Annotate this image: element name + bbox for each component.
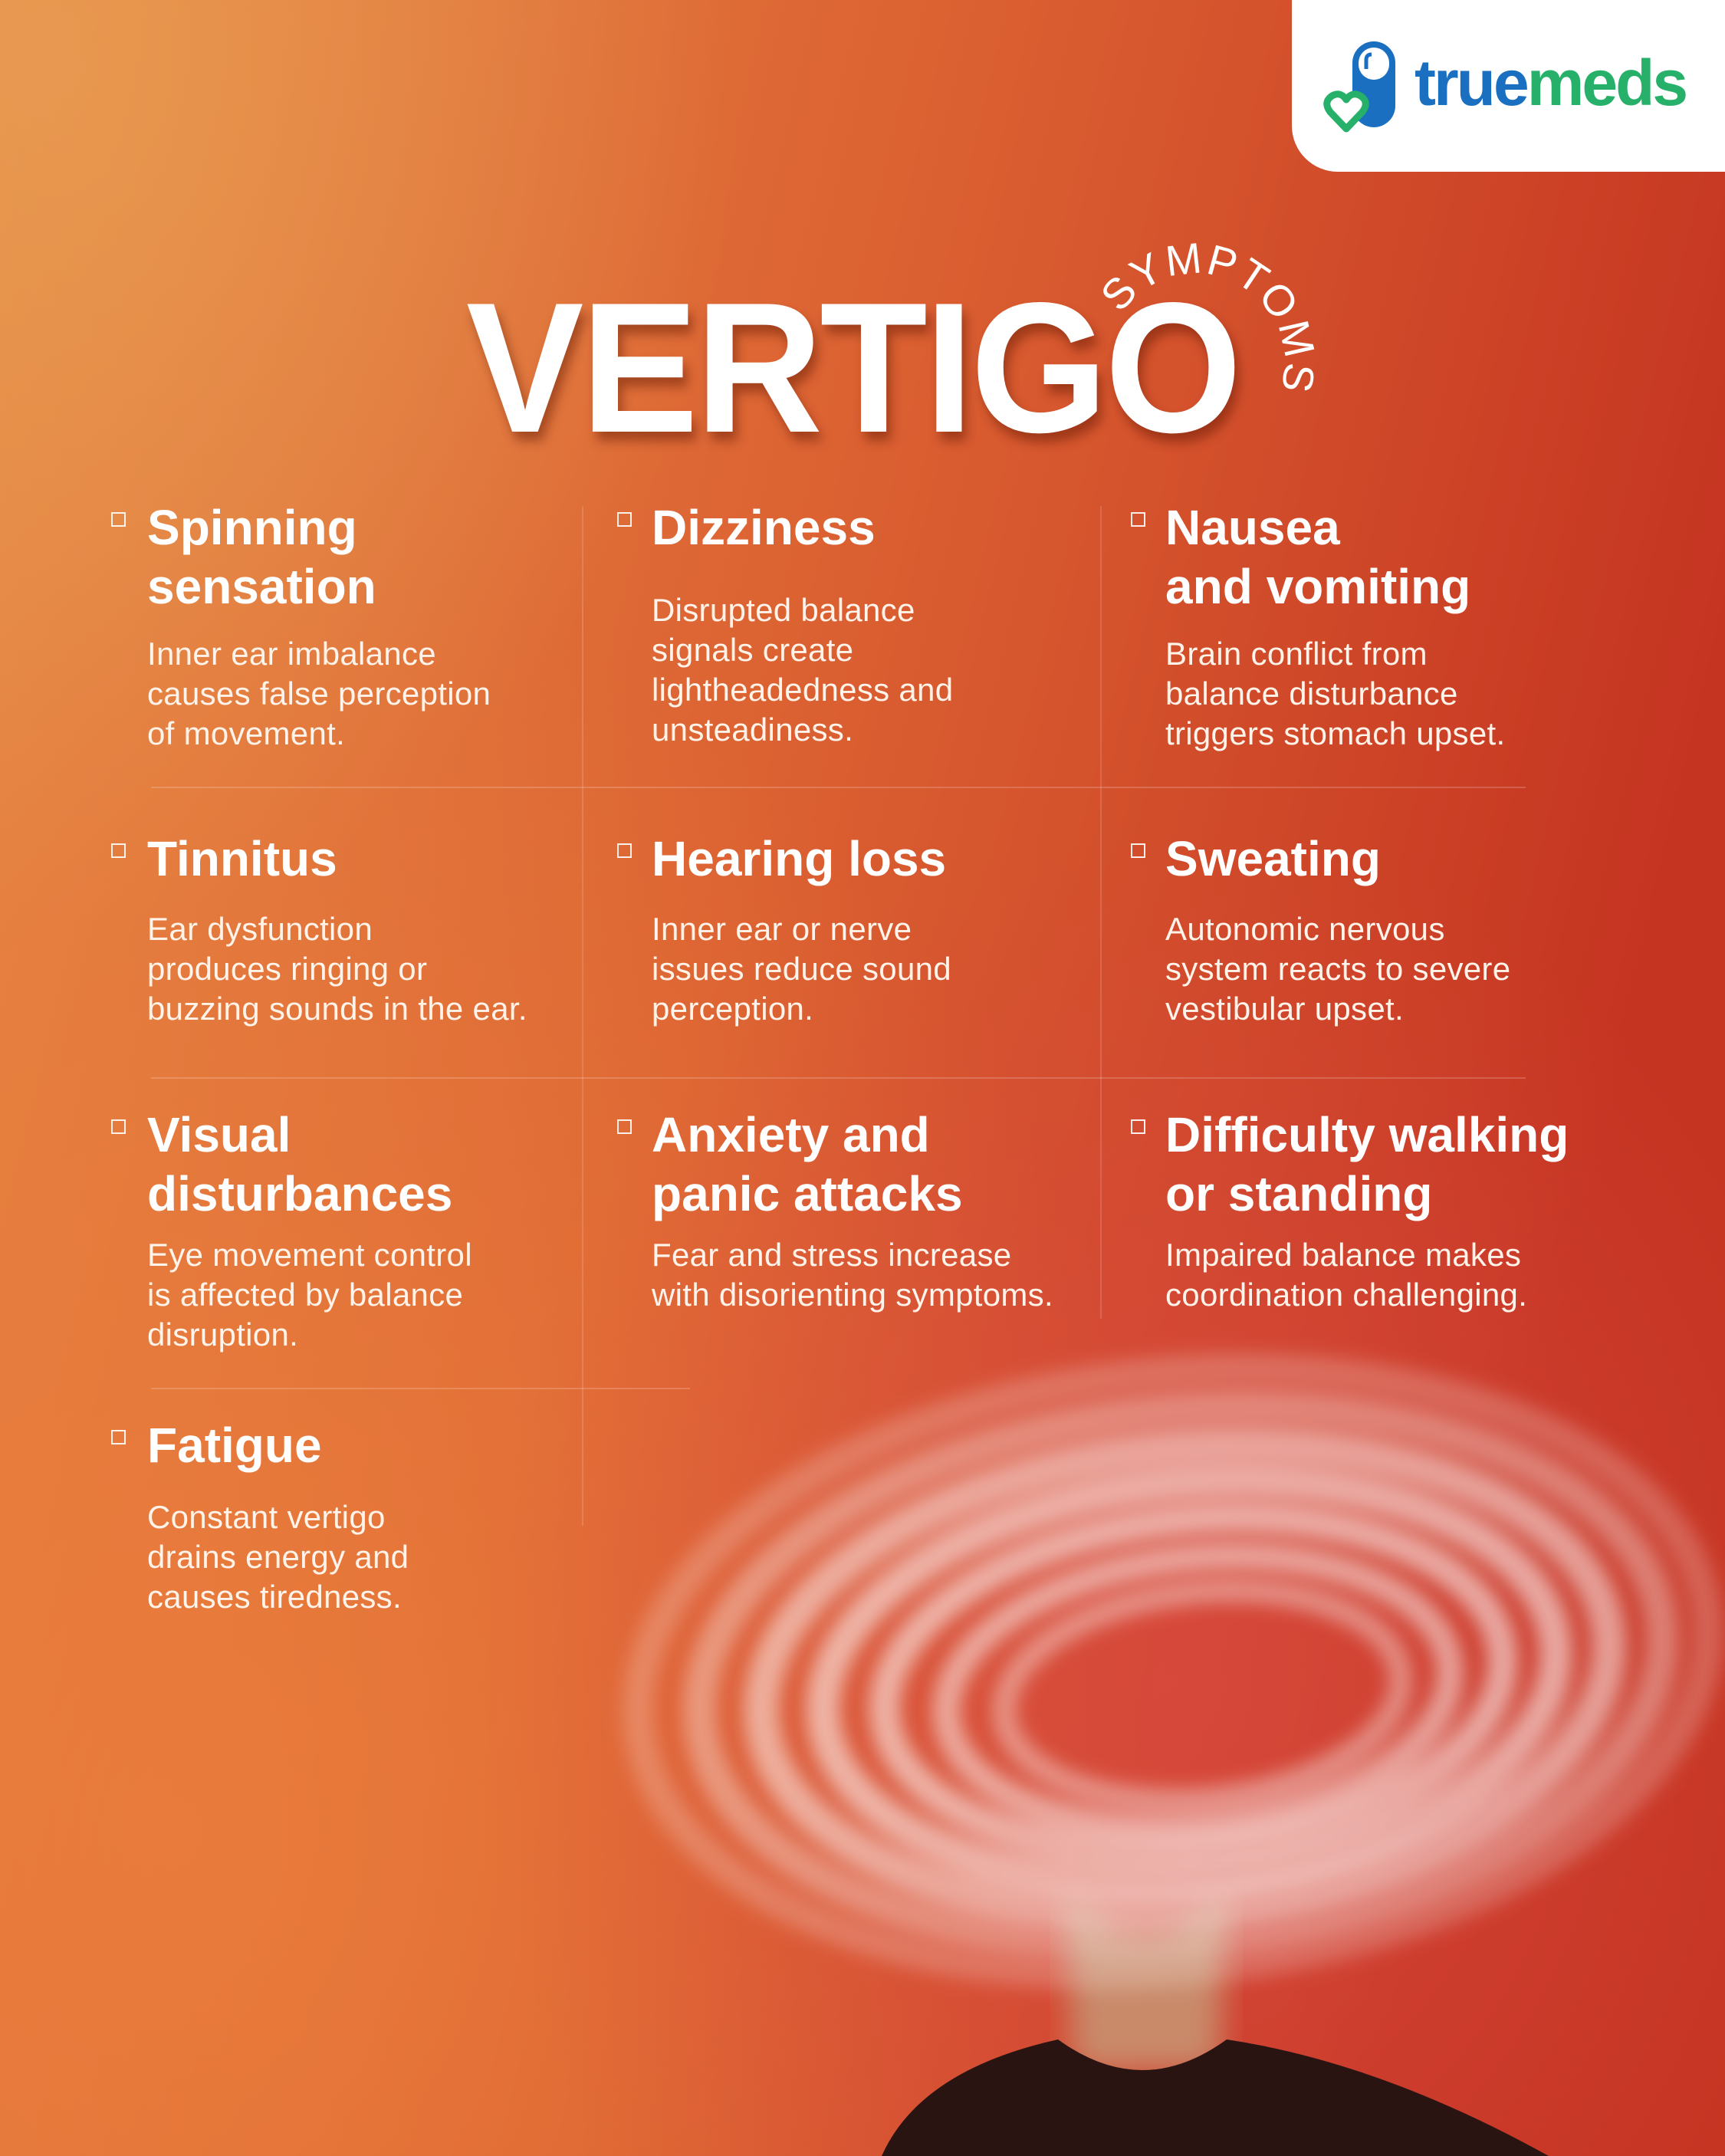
item: Difficulty walking or standing: Impaired balance makes: [1165, 1237, 1521, 1273]
swirl: [608, 1318, 1725, 2025]
item: Hearing loss: [617, 831, 951, 1027]
item: Nausea and vomiting: Nausea: [1165, 500, 1340, 555]
item: Anxiety and panic attacks: Fear and stress increase: [652, 1237, 1011, 1273]
person: neck and shirt: [1066, 1894, 1227, 2070]
item: Fatigue: Fatigue: [147, 1418, 322, 1473]
item: Sweating: vestibular upset.: [1165, 991, 1404, 1027]
item: Tinnitus: Ear dysfunction: [147, 911, 373, 947]
item: Fatigue: Constant vertigo: [147, 1499, 386, 1535]
item: Difficulty walking or standing: [1131, 1107, 1569, 1313]
item: Tinnitus: produces ringing or: [147, 951, 427, 987]
item: Spinning sensation: sensation: [147, 559, 376, 614]
item: Dizziness: signals create: [652, 632, 853, 668]
item: Nausea and vomiting: balance disturbance: [1165, 675, 1458, 712]
item: Nausea and vomiting: [1131, 500, 1505, 751]
item: Visual disturbances: disturbances: [147, 1166, 452, 1221]
item: Fatigue: causes tiredness.: [147, 1579, 402, 1615]
item: Visual disturbances: [111, 1107, 472, 1352]
item: Nausea and vomiting: Brain conflict from: [1165, 636, 1428, 672]
item: Fatigue: drains energy and: [147, 1539, 409, 1575]
item: Dizziness: unsteadiness.: [652, 712, 853, 748]
item: Anxiety and panic attacks: panic attacks: [652, 1166, 963, 1221]
item: Tinnitus: Tinnitus: [147, 831, 337, 886]
title: VERTIGO: [466, 265, 1239, 472]
item: Hearing loss: Hearing loss: [652, 831, 946, 886]
subtitle: SYMPTOMS curved: SYMPTOMS: [1103, 243, 1314, 391]
item: Dizziness: Dizziness: [652, 500, 876, 555]
item: Spinning sensation: Spinning: [147, 500, 357, 555]
item: Dizziness: lightheadedness and: [652, 672, 953, 708]
item: Sweating: [1131, 831, 1510, 1027]
item: Visual disturbances: disruption.: [147, 1316, 298, 1352]
item: Sweating: Autonomic nervous: [1165, 911, 1445, 947]
item: Hearing loss: Inner ear or nerve: [652, 911, 912, 947]
item: Fatigue: [111, 1418, 409, 1615]
item: Nausea and vomiting: and vomiting: [1165, 559, 1470, 614]
item: Hearing loss: issues reduce sound: [652, 951, 951, 987]
item: Tinnitus: [111, 831, 527, 1027]
item: Tinnitus: buzzing sounds in the ear.: [147, 991, 527, 1027]
icon: pill with heart: [1323, 41, 1395, 132]
item: Visual disturbances: is affected by balance: [147, 1277, 463, 1313]
item: Spinning sensation: of movement.: [147, 715, 345, 751]
item: Spinning sensation: Inner ear imbalance: [147, 636, 436, 672]
item: Hearing loss: perception.: [652, 991, 813, 1027]
item: Dizziness: [617, 500, 953, 748]
item: Dizziness: Disrupted balance: [652, 592, 915, 628]
item: Visual disturbances: Visual: [147, 1107, 291, 1162]
item: Spinning sensation: causes false perception: [147, 675, 491, 712]
item: Anxiety and panic attacks: [617, 1107, 1053, 1313]
item: Anxiety and panic attacks: Anxiety and: [652, 1107, 930, 1162]
item: Anxiety and panic attacks: with disorienting symptoms.: [652, 1277, 1053, 1313]
item: Spinning sensation: [111, 500, 491, 751]
item: Nausea and vomiting: triggers stomach upset.: [1165, 715, 1505, 751]
item: Difficulty walking or standing: Difficulty walking: [1165, 1107, 1569, 1162]
item: Visual disturbances: Eye movement control: [147, 1237, 472, 1273]
item: Difficulty walking or standing: coordination challenging.: [1165, 1277, 1527, 1313]
grid lines: [151, 787, 1526, 788]
item: Difficulty walking or standing: or standing: [1165, 1166, 1432, 1221]
logo text: truemeds: [1414, 47, 1686, 119]
item: Sweating: Sweating: [1165, 831, 1381, 886]
logo box: [1292, 0, 1725, 172]
item: Sweating: system reacts to severe: [1165, 951, 1510, 987]
